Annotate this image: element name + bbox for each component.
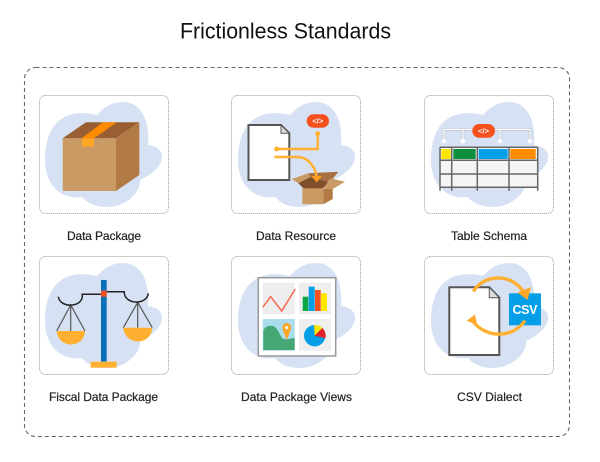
outer dashed container [24,68,570,436]
label: Fiscal Data Package: Fiscal Data Package [49,390,158,404]
chart: line [263,283,295,314]
panel: Table Schema [424,96,554,243]
panel: CSV Dialect [424,256,554,404]
panel: Data Package Views [232,256,360,404]
chart: pie [299,319,331,351]
icon: CSV badge [509,293,541,325]
dashboard frame [258,278,336,356]
icon: document [449,287,499,355]
table [440,147,538,191]
icon: code badge: </> [312,117,324,126]
map with pin [263,319,295,351]
icon: balance scale [57,280,152,368]
icon: code badge [307,114,329,128]
label: Data Package: Data Package [67,229,141,243]
icon: document fold [281,125,289,133]
title: Frictionless Standards [180,18,391,44]
icon: code badge [472,124,495,138]
panel: Data Package [40,96,168,243]
arrow: document to CSV [473,278,531,300]
panel: Fiscal Data Package [40,256,168,404]
label: Table Schema: Table Schema [451,229,527,243]
icon: cardboard box [63,122,139,191]
icon: schema brackets [442,129,532,143]
panel: Data Resource [232,96,360,243]
icon: CSV badge: CSV [512,303,538,317]
label: Data Resource: Data Resource [256,229,336,243]
icon: document fold [489,287,499,298]
chart: bars [299,283,331,314]
arrow: document to box [274,157,322,182]
icon: open box [292,172,345,204]
icon: document [248,125,289,180]
connector: code to document [274,131,320,151]
icon: code badge: </> [478,126,490,135]
label: Data Package Views: Data Package Views [241,390,352,404]
arrow: CSV to document [467,314,525,334]
label: CSV Dialect: CSV Dialect [457,390,523,404]
